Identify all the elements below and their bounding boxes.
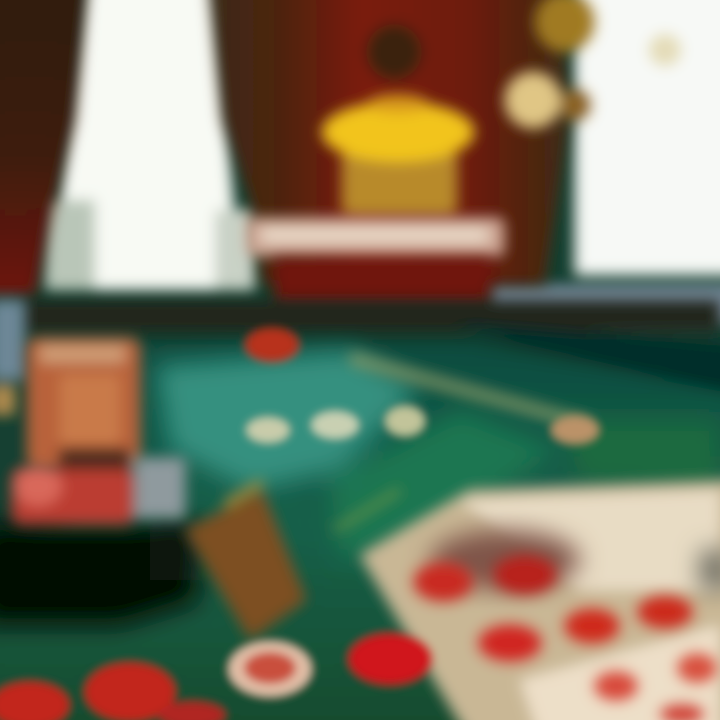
pale banner: [246, 218, 504, 256]
left window: [45, 0, 255, 290]
left curtain: [0, 0, 88, 295]
golden centrepiece: [322, 95, 474, 215]
red chip on far table: [245, 328, 299, 362]
red chip stack: [12, 450, 185, 524]
teal felt highlight: [155, 350, 720, 560]
brown tilted card holder: [185, 482, 306, 640]
orange stacked cup: [27, 338, 140, 468]
gold hanging ornaments: [505, 0, 681, 128]
large red chips in foreground: [0, 633, 432, 720]
cream betting sheet: [360, 480, 720, 720]
left edge blue accent: [0, 300, 25, 415]
dark left shadow: [0, 520, 200, 625]
table betting line: [335, 358, 590, 530]
pale cards on table: [246, 406, 599, 444]
right window: [490, 0, 720, 323]
dark marks on sheet: [430, 530, 720, 590]
centre curtain backdrop: [208, 0, 570, 285]
red table base: [275, 258, 490, 306]
green table surface: [0, 345, 720, 720]
dark horizontal rail: [20, 300, 720, 395]
red chips on sheet: [413, 555, 717, 720]
